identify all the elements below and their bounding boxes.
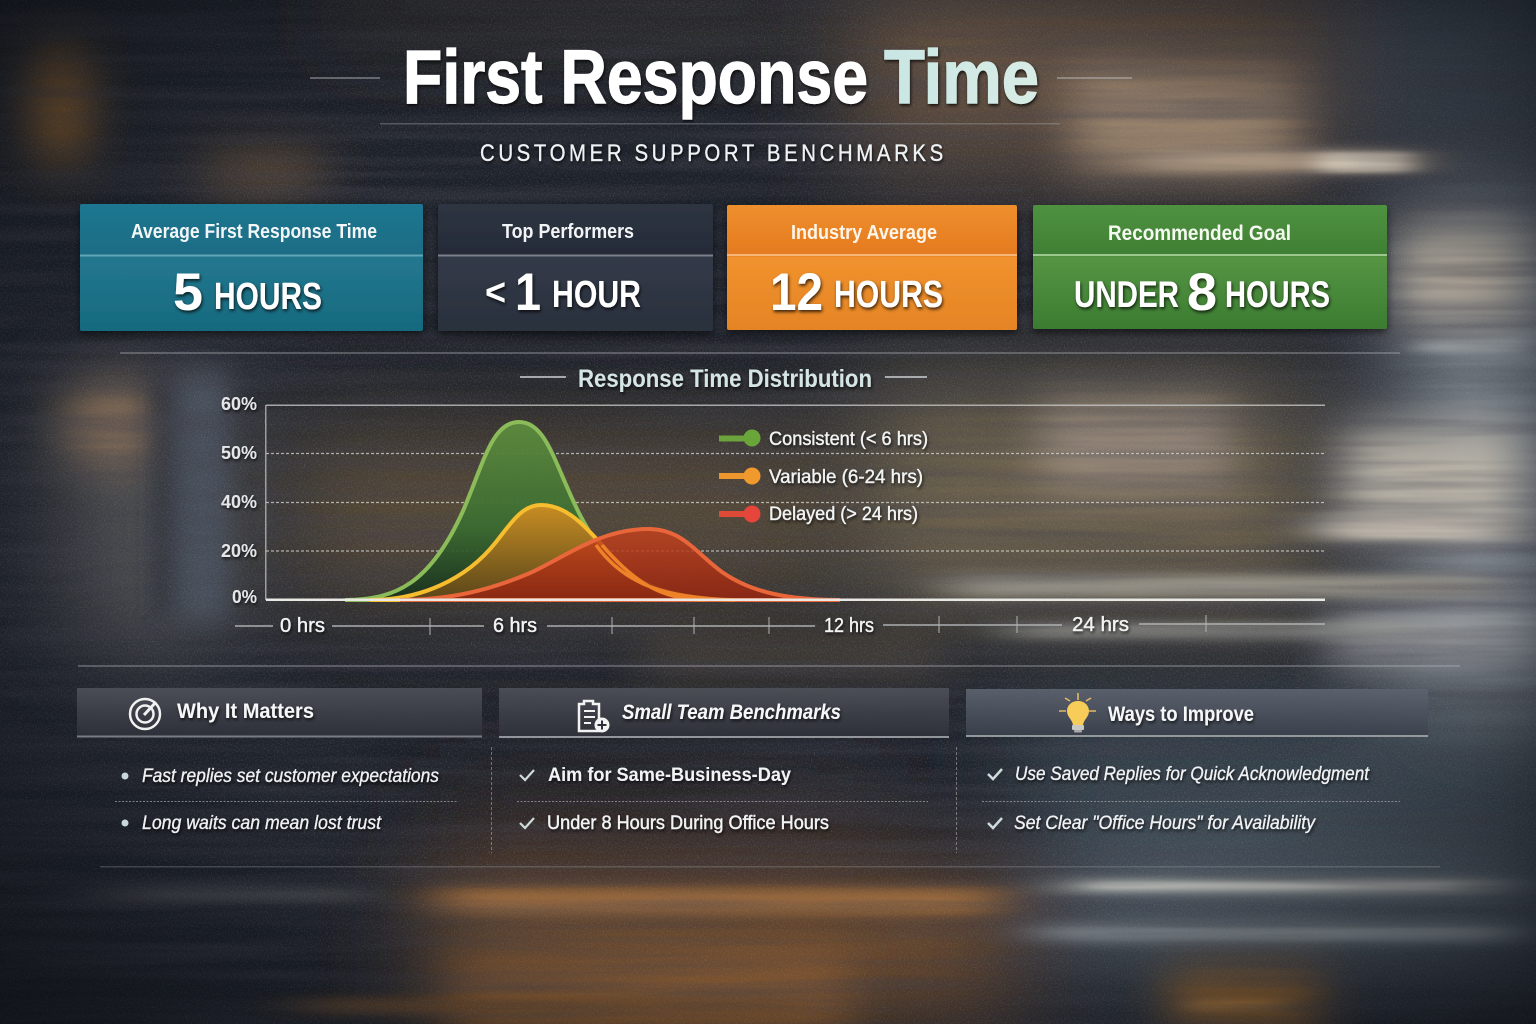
card value (485, 263, 641, 322)
x axis scale: 12 hrs (824, 615, 874, 637)
card value: 12 (770, 263, 823, 322)
chart: response time distribution (221, 393, 1325, 637)
card value (173, 263, 322, 322)
bullet list: Fast replies set customer expectations (142, 766, 439, 787)
card value: HOUR (552, 274, 641, 316)
checklist (517, 764, 928, 834)
curve: variable (370, 505, 705, 600)
chart heading: Response Time Distribution (578, 365, 872, 393)
panel: top performers (438, 204, 713, 331)
subtitle: CUSTOMER SUPPORT BENCHMARKS (480, 139, 943, 166)
legend: Consistent (< 6 hrs) (769, 429, 928, 450)
card value: 5 (173, 263, 203, 322)
y axis labels: 0% (232, 586, 257, 607)
panel: industry average (727, 205, 1017, 330)
card value: HOURS (1225, 274, 1330, 315)
title: Time (884, 35, 1039, 120)
card value (1074, 263, 1330, 322)
y axis labels: 50% (221, 442, 257, 463)
checklist: Use Saved Replies for Quick Acknowledgment (1015, 763, 1370, 785)
legend (719, 429, 928, 525)
legend: Delayed (> 24 hrs) (769, 504, 918, 525)
icon: clipboard (579, 701, 610, 732)
card value: HOURS (214, 276, 322, 318)
checklist: Set Clear "Office Hours" for Availability (1014, 812, 1316, 834)
panel: average first response time (80, 204, 423, 331)
card label: Average First Response Time (131, 221, 377, 243)
curve tails over the delayed area (596, 545, 735, 600)
y axis labels: 60% (221, 393, 257, 414)
card label: Top Performers (502, 221, 634, 243)
card value: HOURS (834, 274, 943, 316)
card value: 8 (1187, 263, 1217, 322)
card value: UNDER (1074, 274, 1179, 315)
section header: Small Team Benchmarks (622, 701, 841, 724)
curve: consistent (345, 422, 735, 600)
section header (77, 688, 482, 738)
panel: why it matters (77, 688, 482, 834)
checklist: Under 8 Hours During Office Hours (547, 812, 829, 834)
panel: ways to improve (966, 689, 1428, 834)
bullet list: Long waits can mean lost trust (142, 813, 382, 834)
card label: Recommended Goal (1108, 222, 1291, 245)
x axis scale: 6 hrs (493, 615, 537, 637)
section header: Why It Matters (177, 700, 314, 723)
card value: < (485, 272, 506, 314)
y axis labels: 40% (221, 491, 257, 512)
curve: delayed (400, 529, 840, 600)
section header (499, 688, 949, 738)
x axis scale: 24 hrs (1072, 614, 1129, 636)
x axis scale (235, 614, 1325, 637)
title block (310, 35, 1132, 166)
title: First Response (403, 35, 868, 120)
section header (966, 689, 1428, 737)
x axis scale: 0 hrs (280, 615, 325, 637)
icon: light bulb (1059, 693, 1096, 732)
panel: small team benchmarks (499, 688, 949, 834)
checklist (982, 763, 1400, 834)
checklist: Aim for Same-Business-Day (548, 764, 791, 786)
section header: Ways to Improve (1108, 703, 1254, 726)
card label: Industry Average (791, 222, 937, 244)
card value (770, 263, 943, 322)
legend: Variable (6-24 hrs) (769, 467, 923, 488)
y axis labels: 20% (221, 540, 257, 561)
card value: 1 (515, 263, 541, 322)
y axis labels (221, 393, 257, 607)
icon: target (130, 699, 160, 729)
panel: recommended goal (1033, 205, 1387, 329)
bullet list (115, 766, 458, 834)
